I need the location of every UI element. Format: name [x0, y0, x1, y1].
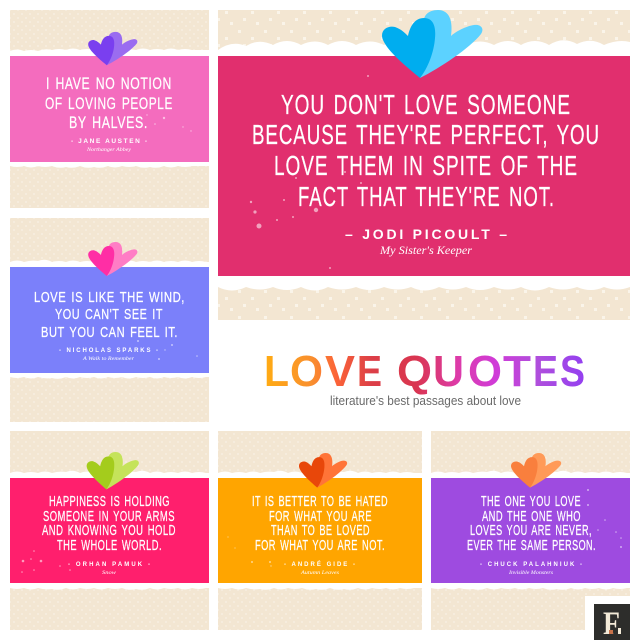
book title: Northanger Abbey: [86, 148, 132, 153]
paint splatter: [250, 75, 369, 269]
paint splatter: [227, 536, 272, 567]
quote text: LOVE IS LIKE THE WIND,: [34, 289, 185, 306]
quote text: SOMEONE IN YOUR ARMS: [43, 509, 175, 525]
quote text: THE WHOLE WORLD.: [57, 538, 162, 554]
colour band: [10, 56, 209, 162]
quote text: BUT YOU CAN FEEL IT.: [41, 324, 178, 341]
quote text: AND KNOWING YOU HOLD: [42, 523, 176, 539]
quote text: THE ONE YOU LOVE: [481, 494, 581, 510]
book title: My Sister's Keeper: [379, 243, 472, 257]
quote text: IT IS BETTER TO BE HATED: [252, 494, 388, 510]
book title: Autumn Leaves: [300, 571, 339, 576]
panel: Jane Austen quote: [10, 10, 209, 208]
heading: Love Quotes: S: [560, 347, 585, 396]
title block: [264, 347, 585, 408]
quote text: [467, 494, 596, 554]
heading: Love Quotes: O: [290, 347, 323, 396]
author: – JODI PICOULT –: [345, 226, 507, 242]
icon: blue hearts: [382, 10, 482, 78]
quote text: I HAVE NO NOTION: [46, 74, 172, 93]
quote text: [42, 494, 176, 554]
quote text: BY HALVES.: [69, 113, 148, 132]
colour band: [10, 267, 209, 373]
panel: Orhan Pamuk quote: [10, 431, 209, 630]
paint splatter: [587, 489, 622, 548]
heading: Love Quotes: V: [325, 347, 356, 396]
author: - ANDRÉ GIDE -: [284, 560, 355, 568]
heading: Love Quotes: O: [468, 347, 502, 396]
paint splatter: [21, 550, 71, 573]
heading: Love Quotes: U: [433, 347, 464, 396]
book title: Invisible Monsters: [508, 571, 553, 576]
author: - NICHOLAS SPARKS -: [59, 348, 158, 354]
panel: André Gide quote: [218, 431, 422, 630]
book title: A Walk to Remember: [82, 357, 134, 362]
panel: Jodi Picoult quote: [218, 10, 630, 320]
heading: Love Quotes: E: [533, 347, 558, 396]
icon: green hearts: [87, 452, 139, 489]
quote text: OF LOVING PEOPLE: [45, 94, 173, 113]
author: - CHUCK PALAHNIUK -: [480, 562, 582, 568]
author: - JANE AUSTEN -: [71, 138, 147, 145]
icon: pink hearts: [88, 242, 137, 276]
quote text: [34, 289, 185, 341]
book title: Snow: [102, 571, 117, 576]
author: - ORHAN PAMUK -: [68, 562, 150, 568]
icon: purple hearts: [88, 32, 137, 65]
panel: Chuck Palahniuk quote: [431, 431, 630, 630]
icon: peach hearts: [511, 453, 561, 488]
colour band: [218, 478, 422, 583]
heading: Love Quotes: T: [503, 347, 531, 396]
quote text: FOR WHAT YOU ARE: [269, 509, 372, 525]
logo badge: [585, 596, 640, 640]
paint splatter: [137, 340, 198, 360]
quote text: THAN TO BE LOVED: [271, 523, 370, 539]
subtitle: literature's best passages about love: [330, 393, 521, 408]
icon: orange hearts: [299, 453, 347, 488]
paint splatter: [146, 114, 192, 132]
quote text: YOU CAN'T SEE IT: [55, 306, 163, 323]
heading: Love Quotes: L: [264, 347, 289, 396]
quote text: [45, 74, 173, 132]
quote text: FOR WHAT YOU ARE NOT.: [255, 538, 385, 554]
quote text: AND THE ONE WHO: [482, 509, 581, 525]
panel: Nicholas Sparks quote: [10, 218, 209, 422]
quote text: HAPPINESS IS HOLDING: [49, 494, 170, 510]
heading: Love Quotes: Q: [397, 347, 432, 396]
colour band: [10, 478, 209, 583]
colour band: [431, 478, 630, 583]
quote text: [252, 89, 600, 212]
colour band: [218, 56, 630, 276]
heading: Love Quotes: E: [357, 347, 382, 396]
quote text: [252, 494, 388, 554]
